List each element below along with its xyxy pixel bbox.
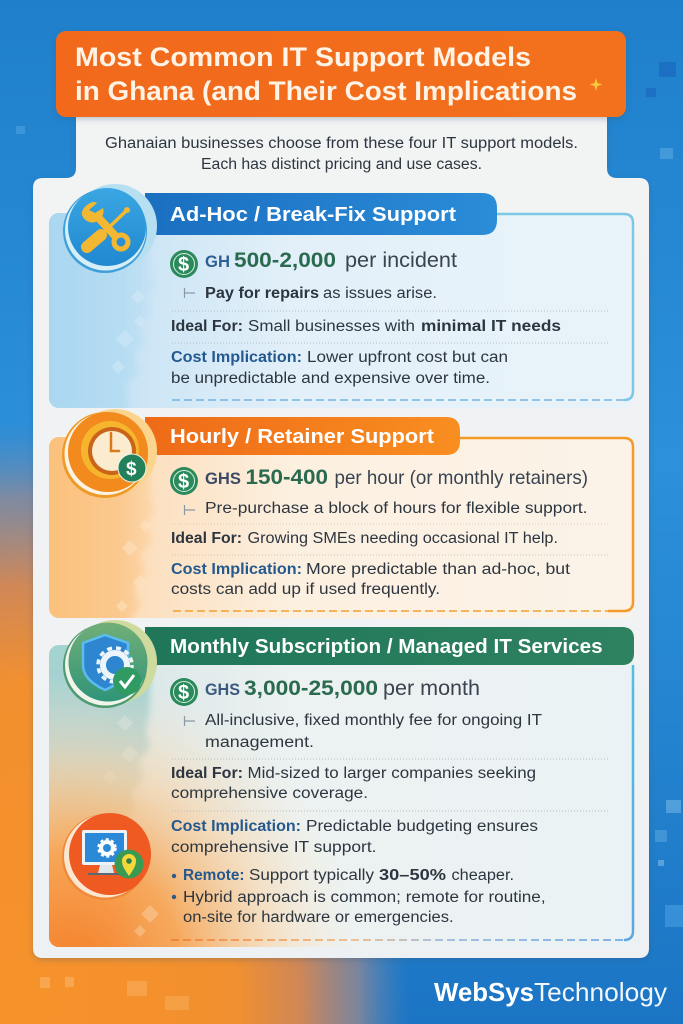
heading bar: managed IT: Monthly Subscription / Managed IT Services: [170, 635, 603, 658]
price row: hourly: 150-400: [246, 466, 328, 489]
ideal for: ad-hoc: Small businesses with: [248, 318, 415, 335]
ideal for: ad-hoc: [171, 318, 561, 335]
logo: WebSysTechnology: Technology: [534, 977, 667, 1007]
logo: WebSysTechnology: WebSys: [434, 977, 534, 1007]
intro text: [105, 135, 578, 173]
ideal for: managed IT: [171, 765, 536, 802]
bullet list: remote and hybrid: Remote:: [183, 867, 244, 884]
icon: clock with dollar badge: $: [126, 459, 137, 480]
panel: hourly retainer support: [40, 409, 634, 625]
cost implication: hourly: Cost Implication:: [171, 561, 302, 578]
price row: ad-hoc: [170, 249, 457, 278]
ideal for: managed IT: Mid-sized to larger companies seeking: [248, 765, 536, 782]
cost implication: managed IT: Predictable budgeting ensures: [306, 818, 538, 835]
heading bar: ad-hoc: Ad-Hoc / Break-Fix Support: [170, 203, 456, 226]
title banner: [56, 31, 626, 117]
bullet list: remote and hybrid: on-site for hardware or emergencies.: [183, 909, 454, 926]
price row: hourly: [170, 466, 588, 495]
cost implication: ad-hoc: Cost Implication:: [171, 349, 302, 366]
cost implication: managed IT: comprehensive IT support.: [171, 839, 376, 856]
icon: remote monitor with location pin: [62, 813, 151, 900]
ideal for: managed IT: Ideal For:: [171, 765, 243, 782]
title banner: in Ghana (and Their Cost Implications: [75, 76, 577, 106]
bullet list: remote and hybrid: cheaper.: [452, 867, 514, 884]
price row: ad-hoc: $: [178, 254, 189, 276]
panel: ad-hoc break-fix support: [40, 184, 634, 412]
heading bar: hourly: [145, 417, 460, 455]
bullet list: remote and hybrid: Hybrid approach is common; remote for routine,: [183, 889, 546, 906]
intro text: Each has distinct pricing and use cases.: [201, 156, 482, 173]
bullet list: remote and hybrid: Support typically: [249, 867, 374, 884]
intro text: Ghanaian businesses choose from these four IT support models.: [105, 135, 578, 152]
heading bar: managed IT: [145, 627, 634, 665]
bullet list: remote and hybrid: [172, 867, 546, 926]
price row: managed IT: per month: [383, 677, 480, 700]
price row: hourly: per hour (or monthly retainers): [334, 467, 588, 489]
ideal for: ad-hoc: minimal IT needs: [421, 318, 561, 335]
price row: ad-hoc: 500-2,000: [234, 249, 336, 272]
price row: managed IT: [170, 677, 480, 706]
cost implication: managed IT: [171, 818, 538, 856]
ideal for: hourly: Ideal For:: [171, 530, 242, 547]
price row: ad-hoc: per incident: [345, 249, 457, 272]
price row: hourly: GHS: [205, 469, 241, 488]
description: managed IT: [184, 712, 543, 751]
cost implication: managed IT: Cost Implication:: [171, 818, 301, 835]
price row: ad-hoc: GH: [205, 252, 230, 271]
price row: hourly: $: [178, 471, 189, 493]
price row: managed IT: $: [178, 682, 189, 704]
cost implication: hourly: costs can add up if used frequently.: [171, 581, 440, 598]
price row: managed IT: 3,000-25,000: [244, 677, 378, 700]
white content panel: [33, 110, 649, 958]
ideal for: managed IT: comprehensive coverage.: [171, 785, 368, 802]
price row: managed IT: GHS: [205, 680, 240, 699]
description: ad-hoc: Pay for repairs: [205, 285, 319, 302]
heading bar: hourly: Hourly / Retainer Support: [170, 425, 434, 448]
description: hourly: Pre-purchase a block of hours for flexible support.: [205, 500, 588, 517]
ideal for: ad-hoc: Ideal For:: [171, 318, 243, 335]
panel: monthly subscription managed IT services: [40, 620, 634, 955]
logo: WebSysTechnology: [434, 977, 667, 1007]
icon: clock with dollar badge: [62, 409, 157, 498]
cost implication: ad-hoc: [171, 349, 508, 387]
description: managed IT: All-inclusive, fixed monthly fee for ongoing IT: [205, 712, 543, 729]
icon: wrench and screwdriver: [63, 184, 157, 273]
heading bar: ad-hoc: [145, 193, 497, 235]
description: ad-hoc: [184, 285, 437, 302]
cost implication: hourly: [171, 561, 571, 598]
cost implication: ad-hoc: be unpredictable and expensive over time.: [171, 370, 490, 387]
bullet list: remote and hybrid: 30–50%: [379, 867, 446, 884]
cost implication: ad-hoc: Lower upfront cost but can: [307, 349, 508, 366]
description: managed IT: management.: [205, 734, 314, 751]
ideal for: hourly: Growing SMEs needing occasional IT help.: [248, 530, 558, 547]
description: ad-hoc: as issues arise.: [323, 285, 437, 302]
title banner: Most Common IT Support Models: [75, 42, 531, 72]
icon: shield with gear and check: [63, 620, 157, 708]
cost implication: hourly: More predictable than ad-hoc, but: [306, 561, 571, 578]
